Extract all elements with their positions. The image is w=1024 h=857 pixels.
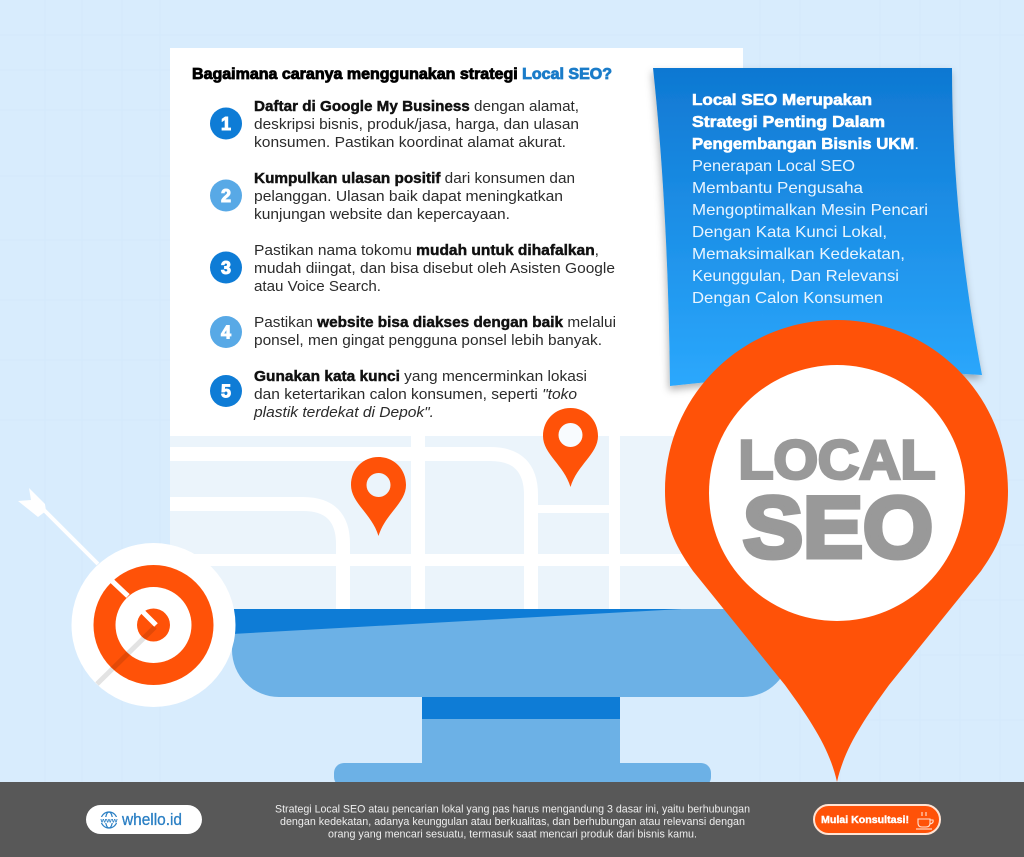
step 5: Gunakan kata kunci yang mencerminkan lokasi [254,368,587,385]
step 4 [210,314,616,349]
icon: target with arrow [18,488,236,707]
logo: whello.id [86,805,202,834]
step 5: plastik terdekat di Depok". [253,404,434,421]
big location pin: LOCAL SEO [665,320,1008,782]
callout: blue note [653,68,982,386]
step 2: Kumpulkan ulasan positif dari konsumen dan [254,170,575,187]
logo: whello.id: whello.id [121,811,182,829]
step 3 [210,242,615,295]
callout: blue note: Memaksimalkan Kedekatan, [692,246,905,263]
footer text [275,804,750,840]
step 5: 5 [221,382,231,402]
big location pin: LOCAL SEO: LOCAL [738,428,936,490]
step 3: atau Voice Search. [254,278,381,295]
button: Mulai Konsultasi: Mulai Konsultasi! [821,814,909,826]
callout: blue note: Mengoptimalkan Mesin Pencari [692,202,928,219]
footer text: Strategi Local SEO atau pencarian lokal yang pas harus mengandung 3 dasar ini, yaitu berhubungan [275,804,750,816]
step 5 [210,368,587,421]
button: Mulai Konsultasi [814,805,940,834]
monitor illustration [232,609,790,787]
callout: blue note: Keunggulan, Dan Relevansi [692,268,899,285]
map background with roads [170,436,743,610]
footer bar [0,782,1024,857]
step 1: 1 [221,114,231,134]
step 3: Pastikan nama tokomu mudah untuk dihafalkan , [254,242,599,259]
callout: blue note: Strategi Penting Dalam [692,114,885,131]
footer text: dengan kedekatan, adanya keunggulan atau berkualitas, dan berhubungan atau relevansi dengan [280,816,745,828]
panel: white instructions card [170,48,743,436]
icon: map pin right [543,408,598,487]
step 1: konsumen. Pastikan koordinat alamat akurat. [254,134,566,151]
callout: blue note: Dengan Calon Konsumen [692,290,883,307]
step 4: 4 [221,322,231,342]
logo: whello.id: www [99,818,119,824]
step 4: Pastikan website bisa diakses dengan baik melalui [254,314,616,331]
callout: blue note: Pengembangan Bisnis UKM . [692,136,919,153]
step 3: 3 [221,258,231,278]
footer text: orang yang mencari sesuatu, termasuk saat mencari produk dari bisnis kamu. [328,828,697,840]
step 4: ponsel, men gingat pengguna ponsel lebih banyak. [254,332,602,349]
callout: blue note: Penerapan Local SEO [692,158,855,175]
heading: how to use Local SEO: Bagaimana caranya menggunakan strategi Local SEO? [192,66,612,83]
step 1: Daftar di Google My Business dengan alamat, [254,98,579,115]
step 1: deskripsi bisnis, produk/jasa, harga, dan ulasan [254,116,579,133]
step 2: kunjungan website dan kepercayaan. [254,206,510,223]
step 2: pelanggan. Ulasan baik dapat meningkatkan [254,188,563,205]
step 3: mudah diingat, dan bisa disebut oleh Asisten Google [254,260,615,277]
callout: blue note: Membantu Pengusaha [692,180,863,197]
big location pin: LOCAL SEO: SEO [743,480,933,576]
callout: blue note: Local SEO Merupakan [692,92,872,109]
callout: blue note: Dengan Kata Kunci Lokal, [692,224,887,241]
step 1 [210,98,579,151]
step 2 [210,170,575,223]
icon: map pin left [351,457,406,536]
step 5: dan ketertarikan calon konsumen, seperti "toko [254,386,577,403]
step 2: 2 [221,186,231,206]
